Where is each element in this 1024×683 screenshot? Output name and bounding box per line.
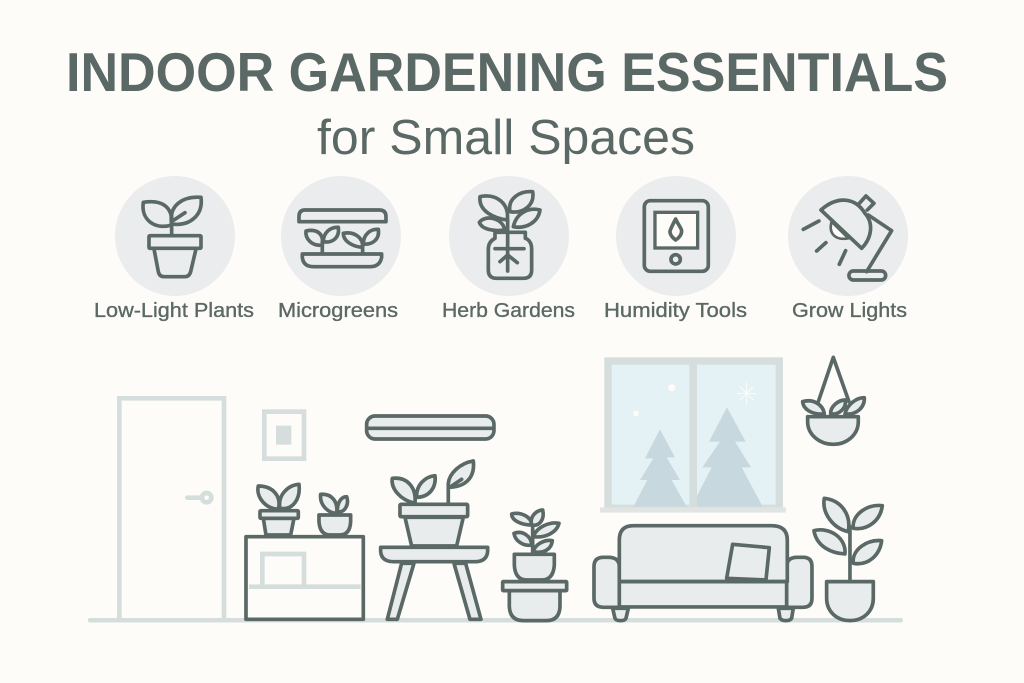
stool: [381, 547, 488, 619]
trees: [633, 407, 763, 507]
wall picture: [264, 412, 304, 459]
plant on stool: [392, 461, 474, 546]
floor line: [88, 618, 903, 622]
icon: herb in jar: [479, 192, 540, 278]
hanging planter: [803, 357, 864, 444]
snow: [634, 382, 756, 415]
subtitle: for Small Spaces: [317, 111, 695, 165]
plant on cabinet: small bowl: [319, 494, 351, 535]
label: Microgreens: [278, 299, 398, 322]
title: INDOOR GARDENING ESSENTIALS: [66, 42, 948, 103]
label: Low-Light Plants: [94, 299, 254, 322]
door: [119, 398, 224, 618]
door handle: [187, 493, 211, 502]
sofa: [594, 526, 812, 621]
icon: microgreens tray under light: [299, 210, 386, 267]
category: Humidity Tools: [604, 176, 747, 322]
category: Grow Lights: [788, 176, 908, 322]
label: Grow Lights: [792, 299, 907, 322]
cabinet: [246, 537, 363, 619]
icon: desk lamp: [803, 196, 892, 280]
window with trees: [600, 361, 786, 513]
label: Humidity Tools: [604, 299, 747, 322]
category: Herb Gardens: [442, 176, 575, 322]
air conditioner: [367, 416, 494, 439]
cushion: [727, 544, 769, 580]
plant on cabinet: left pot: [258, 484, 299, 535]
label: Herb Gardens: [442, 299, 575, 322]
icon: potted seedling: [143, 197, 201, 277]
icon: humidity monitor: [644, 201, 708, 271]
category: Microgreens: [278, 176, 401, 322]
category: Low-Light Plants: [94, 176, 254, 322]
plant on stacked pot: [503, 510, 567, 621]
large potted plant: [814, 498, 882, 621]
